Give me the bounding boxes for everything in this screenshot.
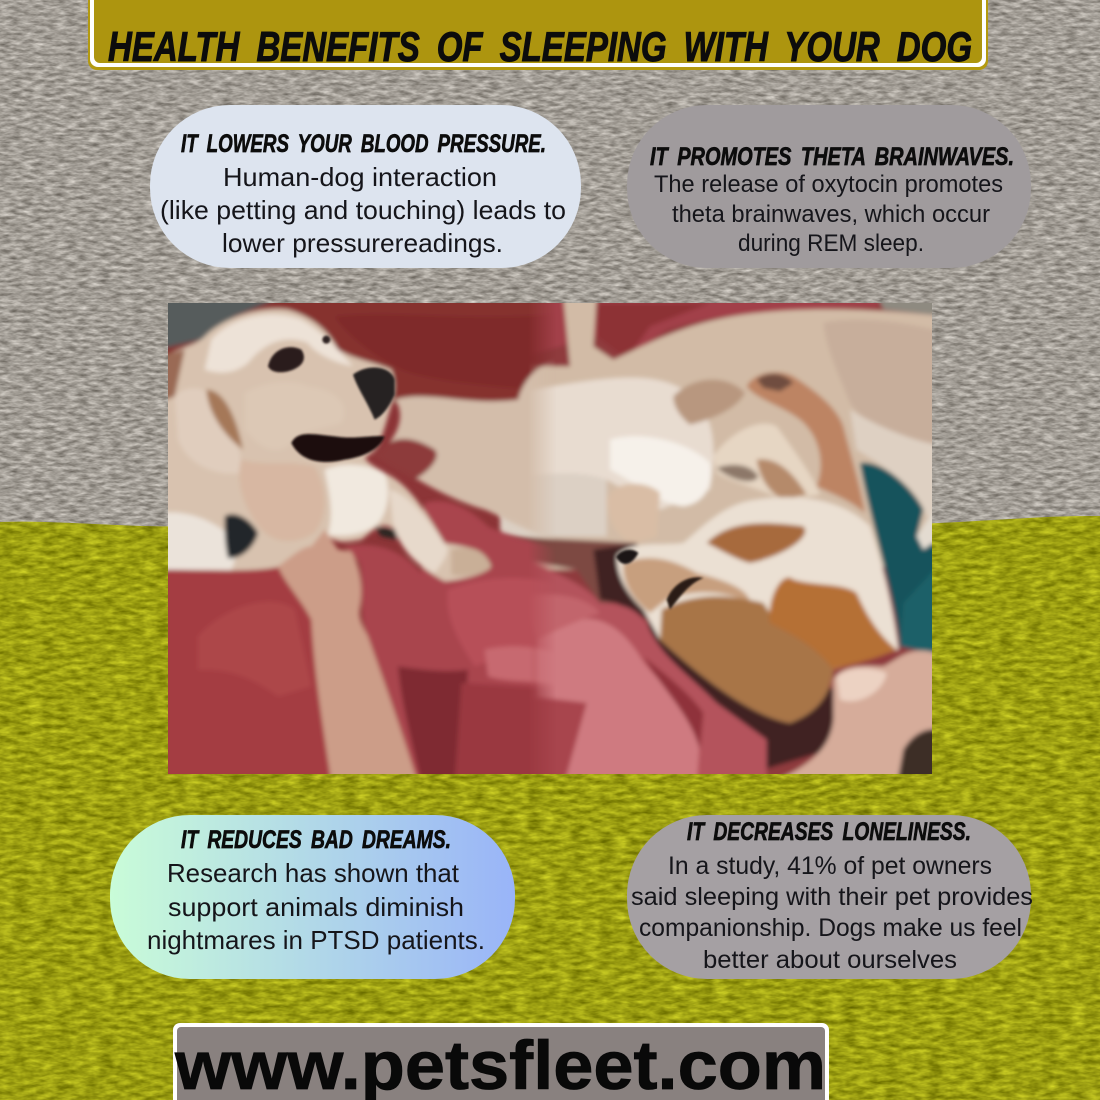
- panel: loneliness: [627, 815, 1033, 979]
- title banner: [88, 0, 988, 70]
- front dog nose and eye: [616, 550, 703, 610]
- heading: theta brainwaves: IT PROMOTES THETA BRAINWAVES.: [650, 143, 1014, 171]
- person hand and arm: [278, 530, 418, 783]
- text: theta brainwaves body: theta brainwaves, which occur: [672, 201, 990, 228]
- left half of photo: golden retriever, arm, blanket: [158, 293, 568, 783]
- person face: [781, 646, 932, 774]
- red blanket right: [345, 501, 568, 783]
- text: bad dreams body: support animals diminish: [168, 892, 464, 922]
- text: loneliness body: [631, 852, 1033, 974]
- text: bad dreams body: nightmares in PTSD patients.: [147, 925, 485, 955]
- background: olive textured floor: [0, 500, 1100, 1100]
- text: loneliness body: In a study, 41% of pet owners: [668, 852, 992, 880]
- text: theta brainwaves body: during REM sleep.: [738, 230, 924, 257]
- text: blood pressure body: Human-dog interaction: [223, 162, 497, 192]
- pink blanket: [530, 562, 770, 774]
- panel: bad dreams: [110, 815, 515, 979]
- near dog silhouette: [158, 309, 491, 581]
- panel: blood pressure: [150, 105, 581, 268]
- dark shadow under dogs: [593, 543, 837, 770]
- front dog leg: [620, 482, 662, 510]
- text: bad dreams body: [147, 858, 485, 955]
- photo: dogs and person on a red bed: [158, 293, 947, 786]
- panel: theta brainwaves: [627, 105, 1031, 268]
- far dog body: [500, 296, 947, 570]
- raised dog leg: [713, 424, 820, 500]
- text: blood pressure body: lower pressurereadings.: [222, 228, 503, 258]
- text: blood pressure body: [160, 162, 566, 258]
- text: theta brainwaves body: [654, 171, 1003, 257]
- right half of photo: dog on its back, person, pillow: [500, 293, 947, 786]
- text: bad dreams body: Research has shown that: [167, 858, 460, 888]
- throat and chest: [239, 460, 325, 541]
- text: loneliness body: companionship. Dogs make us feel: [639, 914, 1022, 942]
- text: loneliness body: said sleeping with their pet provides: [631, 883, 1033, 911]
- far dog fur behind: [375, 360, 568, 543]
- text: blood pressure body: (like petting and touching) leads to: [160, 195, 566, 225]
- teal pillow: [858, 460, 932, 644]
- heading: bad dreams: IT REDUCES BAD DREAMS.: [181, 826, 451, 854]
- person right arm and hand: [747, 372, 865, 513]
- text: loneliness body: better about ourselves: [703, 946, 957, 974]
- heading: loneliness: IT DECREASES LONELINESS.: [687, 818, 971, 846]
- text: theta brainwaves body: The release of oxytocin promotes: [654, 171, 1003, 198]
- background: grey textured wall: [0, 0, 1100, 540]
- red blanket lower left: [158, 566, 331, 783]
- ear: [175, 388, 241, 474]
- website banner: [173, 1023, 829, 1100]
- brown shadow left of dog nose: [510, 534, 634, 600]
- near dog eye, nose and mouth: [268, 336, 395, 462]
- dark collar: [225, 514, 258, 558]
- front dog head: [612, 494, 902, 670]
- heading: blood pressure: IT LOWERS YOUR BLOOD PRESSURE.: [181, 130, 546, 158]
